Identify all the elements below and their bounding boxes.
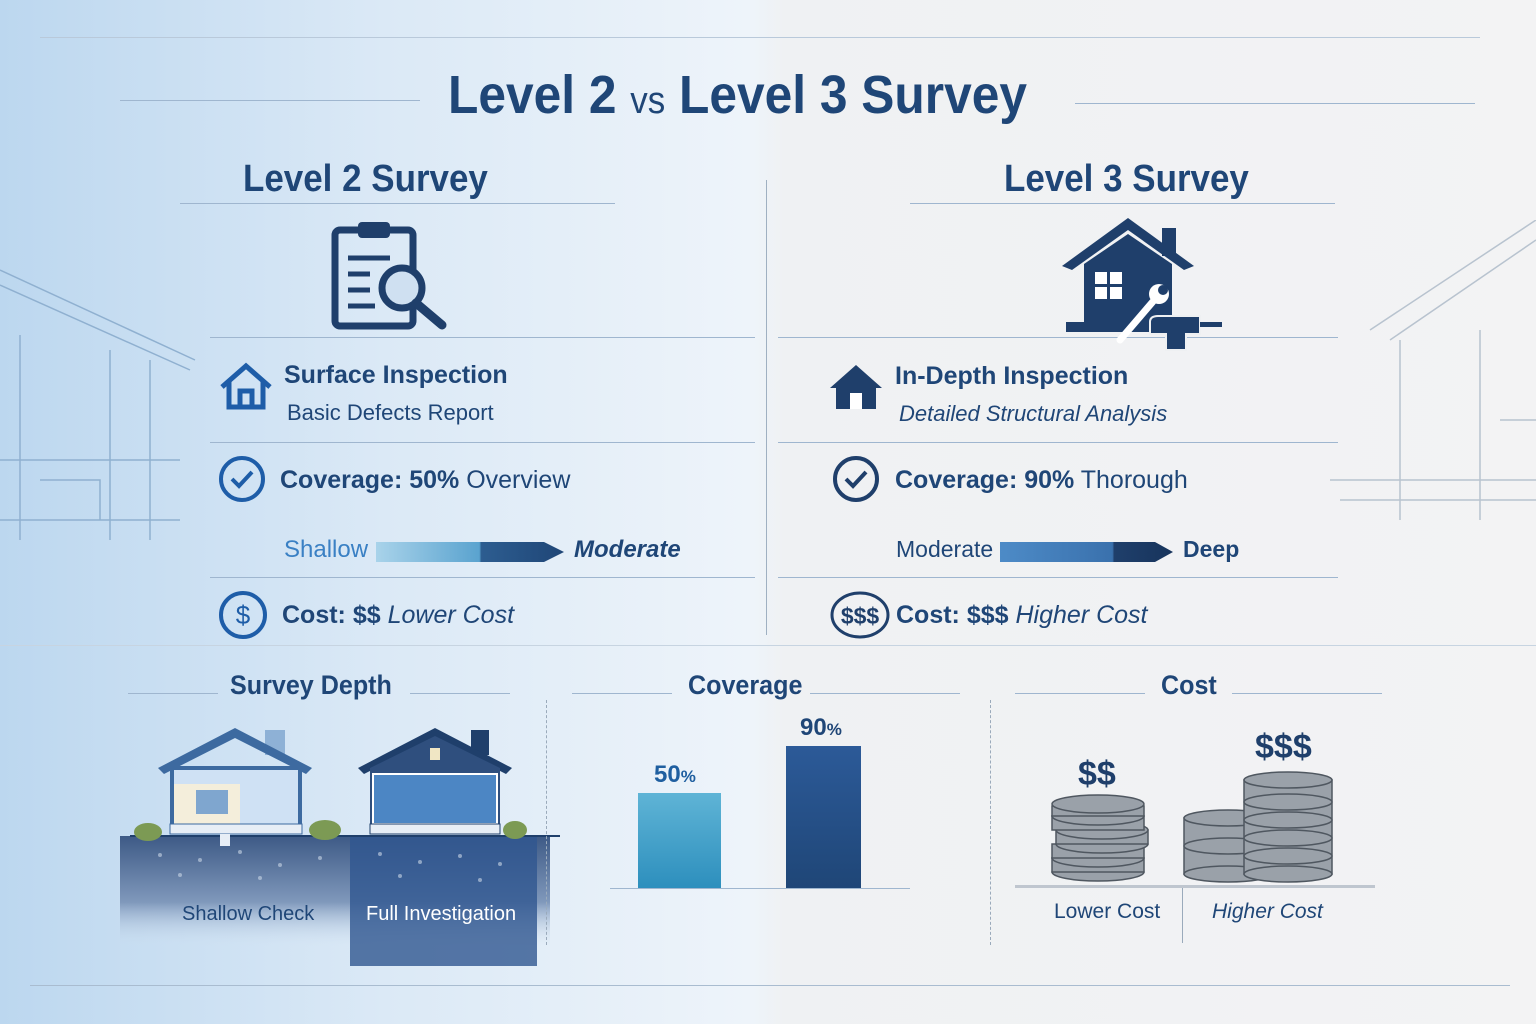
coverage row: Coverage: 90% Thorough xyxy=(895,466,1188,494)
coins stacks xyxy=(1015,771,1375,888)
cost row xyxy=(830,592,1148,638)
illustration: houses and ground xyxy=(120,728,560,966)
label: shallow check: Shallow Check xyxy=(182,903,314,925)
chart: cost: Cost xyxy=(1161,670,1217,700)
icon: house solid xyxy=(830,365,882,409)
icon: clipboard magnifier xyxy=(332,222,446,330)
icon: dollars oval xyxy=(830,592,890,638)
heading: level 2: Level 2 Survey xyxy=(243,158,488,200)
label: full investigation: Full Investigation xyxy=(366,903,516,925)
icon: house with tools xyxy=(1062,218,1222,349)
icon: dollar circle: $ xyxy=(236,600,251,630)
right blueprint house sketch xyxy=(1330,220,1536,520)
in-depth inspection row: Detailed Structural Analysis xyxy=(899,401,1167,426)
panel: level 2 xyxy=(219,158,681,639)
icon: check circle xyxy=(219,456,265,502)
icon: check circle xyxy=(833,456,879,502)
depth bar xyxy=(284,536,681,563)
bar: 90% xyxy=(786,746,861,888)
icon: dollar circle xyxy=(219,591,267,639)
chart: survey depth: Survey Depth xyxy=(230,670,392,700)
depth bar xyxy=(896,536,1239,562)
panel: level 3 xyxy=(830,158,1249,638)
bar: 50% xyxy=(638,793,721,888)
chart: coverage: 90% xyxy=(800,714,842,741)
chart: survey depth xyxy=(120,670,560,966)
labels: cost: Lower Cost xyxy=(1054,900,1160,923)
depth bar: Moderate xyxy=(574,536,681,563)
in-depth inspection row xyxy=(830,362,1167,426)
depth bar: Deep xyxy=(1183,536,1239,562)
chart: cost xyxy=(1015,670,1382,943)
chart: cost: $$$ xyxy=(1255,728,1312,766)
chart: cost: Higher Cost xyxy=(1212,900,1323,923)
icon: house outline xyxy=(220,362,272,410)
chart: coverage: 50% xyxy=(654,761,696,788)
chart: cost: $$ xyxy=(1078,755,1116,793)
cost row xyxy=(219,591,515,639)
coverage row xyxy=(219,456,570,502)
cost row: Cost: $$$ Higher Cost xyxy=(896,601,1148,629)
icon: dollars oval: $$$ xyxy=(841,603,879,629)
chart: coverage xyxy=(572,670,960,889)
left blueprint house sketch xyxy=(0,270,196,540)
depth bar: Moderate xyxy=(896,536,993,562)
heading: level 3: Level 3 Survey xyxy=(1004,158,1249,200)
surface inspection row xyxy=(220,361,508,425)
chart: coverage: Coverage xyxy=(688,670,802,700)
depth bar: Shallow xyxy=(284,536,368,563)
coverage row xyxy=(833,456,1188,502)
coverage row: Coverage: 50% Overview xyxy=(280,466,570,494)
in-depth inspection row: In-Depth Inspection xyxy=(895,362,1128,390)
title: Level 2 vs Level 3 Survey xyxy=(448,65,1027,125)
surface inspection row: Surface Inspection xyxy=(284,361,508,389)
surface inspection row: Basic Defects Report xyxy=(287,400,494,425)
cost row: Cost: $$ Lower Cost xyxy=(282,601,514,629)
